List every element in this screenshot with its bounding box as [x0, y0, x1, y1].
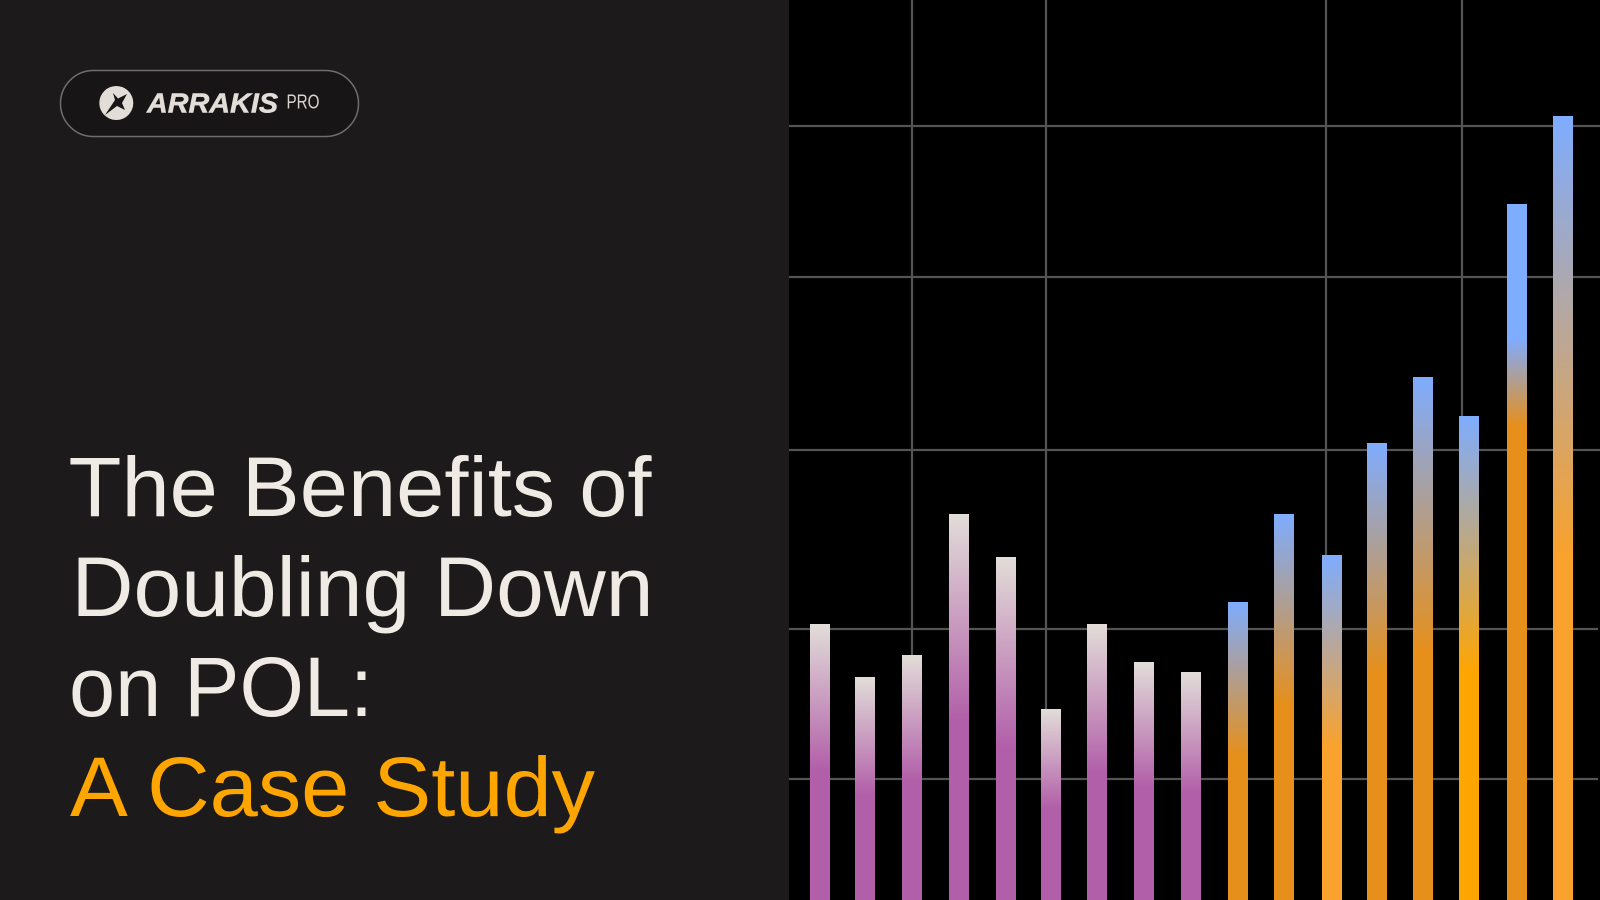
bar 6 [1041, 709, 1061, 900]
bar 5 [996, 557, 1016, 900]
wordmark: ARRAKIS [146, 88, 278, 119]
bar 16 [1507, 204, 1527, 900]
bar 17 [1553, 116, 1573, 900]
title [68, 440, 654, 834]
bar 4 [949, 514, 969, 900]
title line 3: on POL: [69, 640, 373, 734]
bar 13 [1367, 443, 1387, 900]
bar 9 [1181, 672, 1201, 900]
bar 10 [1228, 602, 1248, 900]
panel: bar chart [789, 0, 1600, 900]
panel: title side [0, 0, 789, 900]
icon: Arrakis star in circle [99, 86, 133, 120]
title line 4: highlighted: A Case Study [70, 740, 595, 834]
badge outline [60, 70, 358, 136]
bar 7 [1087, 624, 1107, 900]
bar 1 [810, 624, 830, 900]
title line 2: Doubling Down [72, 540, 654, 634]
bar 3 [902, 655, 922, 900]
bar 14 [1413, 377, 1433, 900]
bar 15 [1459, 416, 1479, 900]
bar 8 [1134, 662, 1154, 900]
bar 11 [1274, 514, 1294, 900]
logo badge: Arrakis Pro [60, 70, 360, 138]
bar 2 [855, 677, 875, 900]
title line 1: The Benefits of [68, 440, 652, 534]
PRO tag: PRO [286, 90, 320, 113]
bar 12 [1322, 555, 1342, 900]
